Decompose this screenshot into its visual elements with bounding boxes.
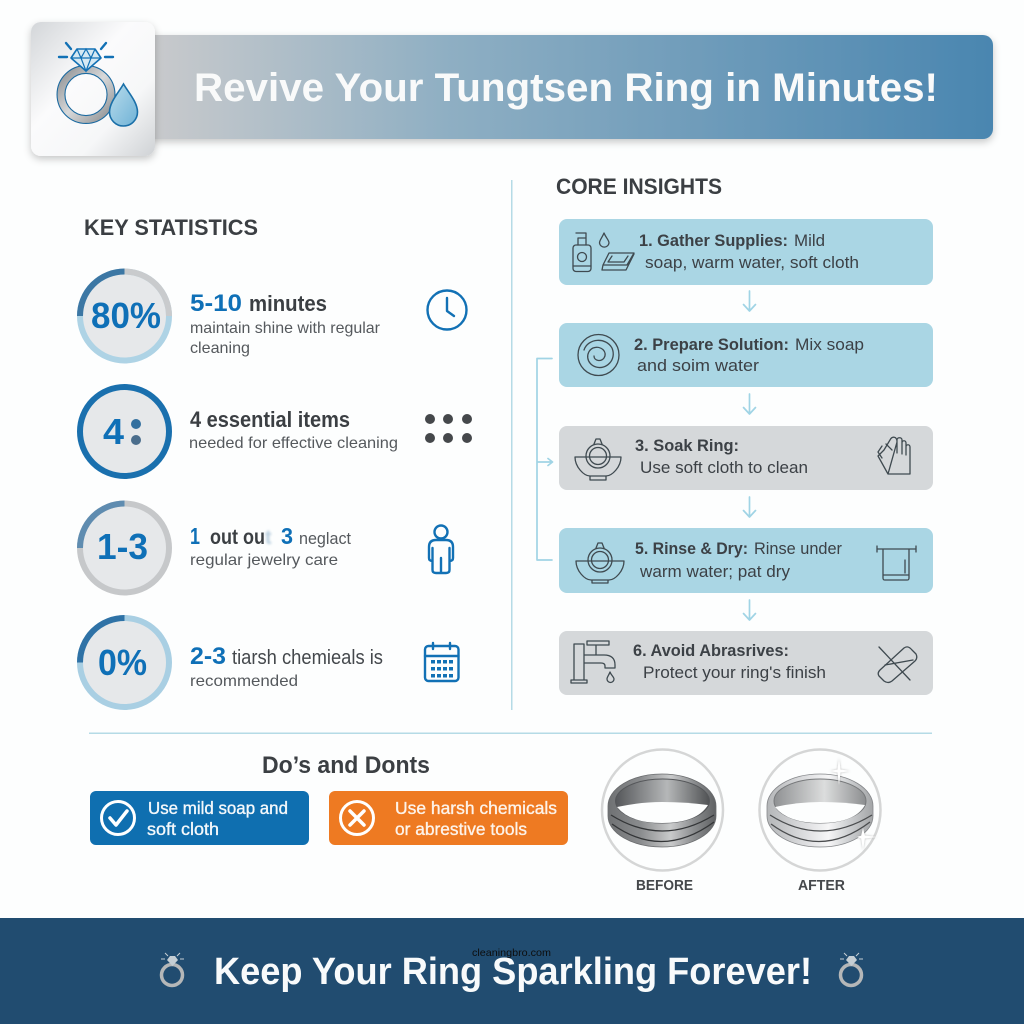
step 2: prepare solution: Mix soap: [795, 335, 864, 354]
website credit: cleaningbro.com: [472, 947, 551, 959]
stat 2 gauge: [80, 387, 169, 476]
icon: six dots: [425, 414, 472, 443]
heading: dos and donts: Do’s and Donts: [262, 752, 430, 779]
icon: swirl: [578, 334, 619, 376]
label: before: BEFORE: [636, 878, 693, 894]
step 5: rinse and dry: 5. Rinse & Dry:: [635, 539, 748, 558]
arrow 5 to 6: [744, 600, 756, 620]
stat 3 gauge: 1-3: [97, 526, 148, 567]
stat 4 text: [190, 643, 383, 690]
icon: ring in bowl: [576, 543, 624, 583]
stat 1 text: maintain shine with regular: [190, 320, 381, 337]
title: Revive Your Tungtsen Ring in Minutes!: [194, 66, 938, 110]
panel: key statistics list: [80, 272, 472, 707]
stat 3 text: [190, 523, 351, 569]
stat 3 text: 1: [190, 523, 200, 549]
footer banner: [0, 918, 1024, 1024]
icon: right ring: [840, 953, 863, 986]
step 1: gather supplies: Mild: [794, 231, 825, 250]
stat 3 gauge: [80, 504, 169, 592]
step 2: prepare solution: [559, 323, 933, 387]
icon: check circle: [102, 802, 134, 834]
stat 1 gauge: 80%: [91, 295, 161, 336]
step 2: prepare solution: and soim water: [637, 356, 759, 375]
stat 3 text: out ou: [210, 526, 265, 549]
title banner: [150, 35, 993, 139]
step 3: soak ring: Use soft cloth to clean: [640, 458, 808, 477]
stat 3 text: t: [265, 527, 272, 549]
stat 4 gauge: [80, 618, 169, 707]
icon: soap and cloth: [573, 233, 634, 272]
icon: ring in bowl: [575, 439, 621, 480]
figure: before ring: [602, 750, 723, 894]
figure: after ring: [760, 750, 880, 894]
heading: key statistics: KEY STATISTICS: [84, 215, 258, 240]
icon: cross circle: [340, 802, 374, 834]
label: after: AFTER: [798, 878, 845, 894]
icon: person: [429, 526, 453, 573]
panel: dont card: Use harsh chemicals: [395, 798, 557, 818]
icon: faucet: [571, 641, 615, 683]
icon: towel on rail: [877, 546, 916, 580]
panel: dont card: [329, 791, 568, 845]
stat 4 text: recommended: [190, 673, 298, 690]
stat 2 gauge: 4: [103, 411, 124, 452]
stat 1 text: [190, 290, 381, 357]
step 2: prepare solution: 2. Prepare Solution:: [634, 335, 789, 354]
step 6: avoid abrasives: Protect your ring's finish: [643, 663, 826, 682]
icon: hand with cloth: [878, 437, 910, 474]
icon: ring and water drop tile: [31, 22, 155, 156]
icon: left ring: [161, 953, 184, 986]
step 5: rinse and dry: [559, 528, 933, 593]
bracket arrow from step 2 to steps 3 and 5: [537, 358, 552, 560]
stat 2 text: [189, 407, 398, 452]
stat 3 text: regular jewelry care: [190, 552, 338, 569]
arrow 3 to 5: [744, 497, 756, 517]
section divider: [89, 732, 932, 734]
stat 1 text: 5-10: [190, 290, 242, 317]
step 3: soak ring: [559, 426, 933, 490]
step 6: avoid abrasives: [559, 631, 933, 695]
stat 1 gauge: [80, 272, 169, 360]
step 3: soak ring: 3. Soak Ring:: [635, 436, 739, 455]
stat 4 text: tiarsh chemieals is: [232, 647, 383, 669]
stat 1 text: cleaning: [190, 340, 250, 357]
step 5: rinse and dry: warm water; pat dry: [639, 562, 791, 581]
stat 1 text: minutes: [249, 291, 327, 316]
step 5: rinse and dry: Rinse under: [754, 539, 842, 558]
step 1: gather supplies: soap, warm water, soft cloth: [645, 253, 859, 272]
step 6: avoid abrasives: 6. Avoid Abrasrives:: [633, 641, 789, 660]
panel: do card: Use mild soap and: [148, 798, 288, 818]
column divider: [511, 180, 512, 710]
panel: core insights flow: [537, 219, 933, 695]
panel: dont card: or abrestive tools: [395, 819, 527, 839]
icon: clock: [428, 290, 466, 330]
stat 3 text: neglact: [299, 529, 351, 548]
arrow 1 to 2: [744, 291, 756, 311]
footer slogan: Keep Your Ring Sparkling Forever!: [214, 951, 812, 993]
stat 4 text: 2-3: [190, 643, 226, 670]
icon: crossed-out sponge: [878, 647, 917, 682]
panel: do card: soft cloth: [147, 819, 219, 839]
stat 4 gauge: 0%: [98, 642, 147, 683]
heading: core insights: CORE INSIGHTS: [556, 174, 722, 199]
step 1: gather supplies: 1. Gather Supplies:: [639, 231, 788, 250]
step 1: gather supplies: [559, 219, 933, 285]
stat 2 text: needed for effective cleaning: [189, 435, 398, 452]
stat 2 text: 4 essential items: [190, 407, 350, 432]
icon: calendar: [425, 643, 458, 681]
stat 3 text: 3: [281, 523, 293, 549]
arrow 2 to 3: [744, 394, 756, 414]
icon: sparkles: [830, 758, 877, 850]
panel: do card: [90, 791, 309, 845]
